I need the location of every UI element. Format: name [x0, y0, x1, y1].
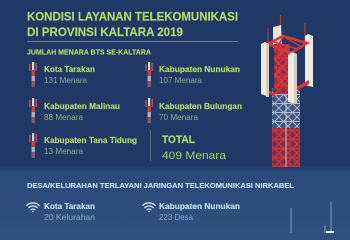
stat: total: 409 Menara [162, 150, 227, 162]
stat: total: TOTAL [162, 134, 195, 146]
stat: Kabupaten Tana Tidung [30, 133, 137, 158]
heading: desa/kelurahan: DESA/KELURAHAN TERLAYANI JARINGAN TELEKOMUNIKASI NIRKABEL [27, 181, 294, 190]
left panel [261, 42, 269, 97]
illustration: lower antennas [291, 202, 334, 233]
stat: Kabupaten Nunukan: Kabupaten Nunukan [159, 65, 240, 74]
stat: Kota Tarakan [30, 62, 95, 87]
stat: total [162, 134, 227, 162]
stat: Kota Tarakan: Kota Tarakan [44, 65, 95, 74]
stat: Kabupaten Nunukan desa: Kabupaten Nunukan [159, 202, 240, 211]
stat: Kabupaten Nunukan [146, 62, 240, 87]
stat: Kabupaten Bulungan [146, 98, 242, 123]
stat: Kabupaten Tana Tidung: 13 Menara [44, 147, 84, 156]
title: KONDISI LAYANAN TELEKOMUNIKASI [27, 12, 238, 24]
stat: Kabupaten Malinau: 88 Menara [44, 113, 84, 122]
red upper lattice [274, 44, 290, 94]
stat: Kabupaten Malinau [30, 98, 120, 123]
antenna rods [268, 15, 305, 46]
lower bracket [268, 80, 309, 97]
heading: jumlah menara: JUMLAH MENARA BTS SE-KALTARA [27, 48, 151, 56]
stat: Kota Tarakan kelurahan [27, 202, 95, 222]
stat: Kabupaten Bulungan: Kabupaten Bulungan [159, 102, 242, 111]
mast [272, 88, 300, 167]
panel: lower section [0, 166, 350, 236]
platform [268, 36, 307, 53]
illustration: telecom tower [261, 15, 313, 167]
stat: Kabupaten Tana Tidung: Kabupaten Tana Tidung [44, 136, 137, 145]
back panel [273, 25, 282, 48]
stat: Kabupaten Nunukan desa: 223 Desa [159, 213, 194, 222]
title: DI PROVINSI KALTARA 2019 [27, 27, 183, 39]
title [27, 12, 238, 39]
stat: Kota Tarakan kelurahan: Kota Tarakan [44, 202, 95, 211]
stat: Kota Tarakan kelurahan: 20 Kelurahan [44, 213, 95, 222]
stat: Kabupaten Bulungan: 70 Menara [159, 113, 199, 122]
stat: Kabupaten Nunukan desa [143, 202, 240, 222]
center panel [288, 52, 297, 104]
stat: Kabupaten Malinau: Kabupaten Malinau [44, 102, 120, 111]
stat: Kota Tarakan: 131 Menara [44, 76, 88, 85]
stat: Kabupaten Nunukan: 107 Menara [159, 76, 203, 85]
right panel [305, 34, 313, 87]
